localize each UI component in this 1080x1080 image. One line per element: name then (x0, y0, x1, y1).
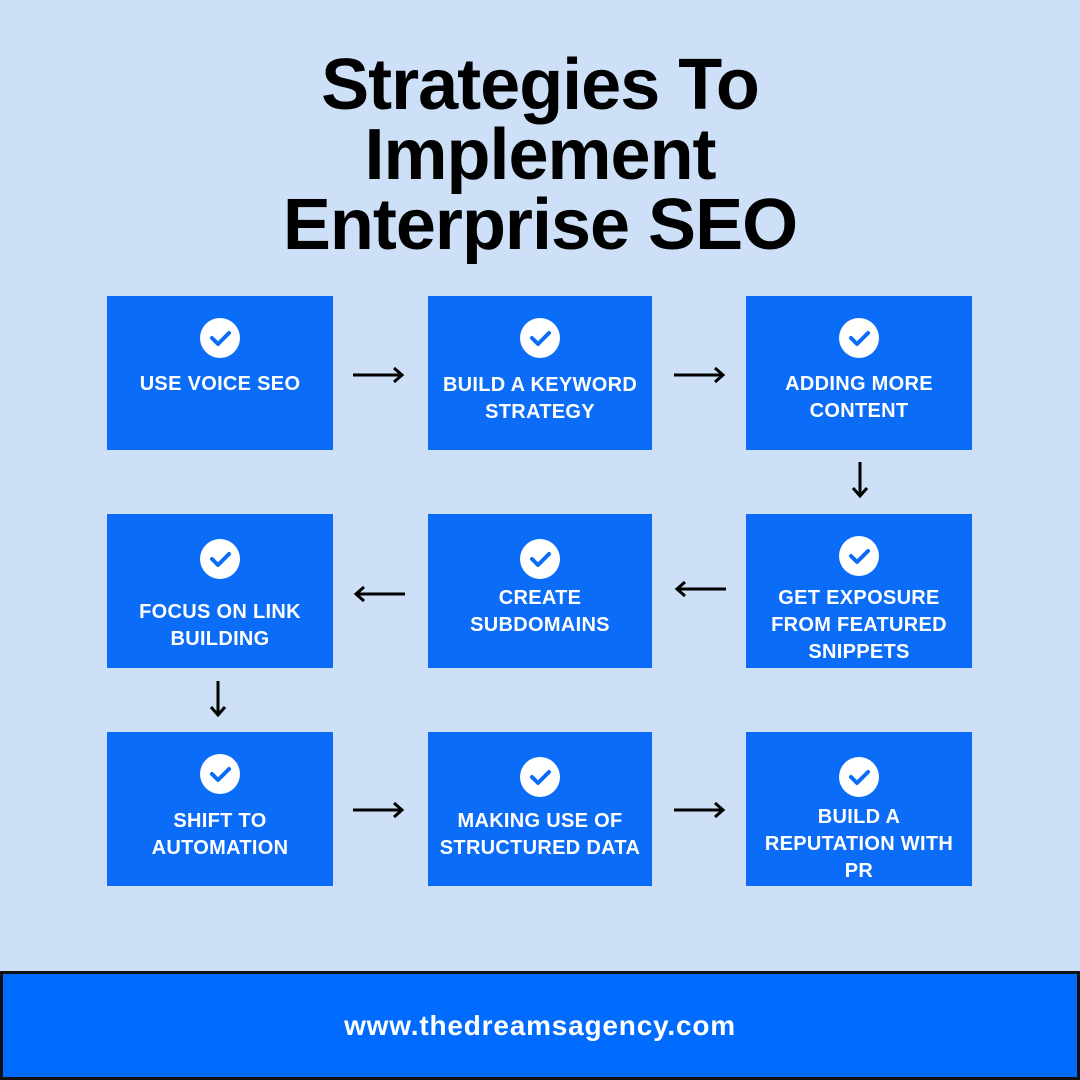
box: subdomains (428, 514, 652, 668)
box: structured data (428, 732, 652, 886)
box: keyword strategy: BUILD A KEYWORD (443, 374, 637, 396)
box: automation (107, 732, 333, 886)
box: automation: SHIFT TO (173, 810, 267, 832)
box: use voice seo (107, 296, 333, 450)
arrow 4 (354, 586, 405, 602)
box: featured snippets: GET EXPOSURE (778, 587, 940, 609)
box: reputation with pr: PR (845, 860, 873, 882)
box: structured data: MAKING USE OF (457, 810, 622, 832)
box: reputation with pr: BUILD A (818, 806, 900, 828)
arrow 3 (674, 580, 726, 598)
footer (0, 971, 1080, 1080)
arrow down 1 (852, 462, 868, 498)
arrow 5 (353, 802, 404, 818)
box: structured data: STRUCTURED DATA (440, 837, 640, 859)
box: use voice seo: USE VOICE SEO (140, 373, 300, 395)
box: adding more content: CONTENT (810, 400, 908, 422)
box: keyword strategy (428, 296, 652, 450)
footer: www.thedreamsagency.com (344, 1010, 736, 1041)
box: subdomains: CREATE (499, 587, 581, 609)
arrow 6 (674, 802, 726, 818)
box: automation: AUTOMATION (152, 837, 288, 859)
box: reputation with pr: REPUTATION WITH (765, 833, 953, 855)
box: link building (107, 514, 333, 668)
box: adding more content (746, 296, 972, 450)
title: Implement (364, 115, 716, 195)
box: reputation with pr (746, 732, 972, 886)
title (283, 45, 797, 265)
box: keyword strategy: STRATEGY (485, 401, 595, 423)
box: featured snippets: FROM FEATURED (771, 614, 947, 636)
arrow 1 (353, 366, 404, 384)
arrow 2 (674, 366, 726, 384)
arrow down 2 (210, 681, 226, 718)
title: Strategies To (321, 45, 759, 125)
box: featured snippets: SNIPPETS (808, 641, 910, 663)
box: link building: BUILDING (170, 628, 270, 650)
box: link building: FOCUS ON LINK (139, 601, 301, 623)
box: featured snippets (746, 514, 972, 668)
box: adding more content: ADDING MORE (785, 373, 933, 395)
box: subdomains: SUBDOMAINS (470, 614, 610, 636)
title: Enterprise SEO (283, 185, 797, 265)
